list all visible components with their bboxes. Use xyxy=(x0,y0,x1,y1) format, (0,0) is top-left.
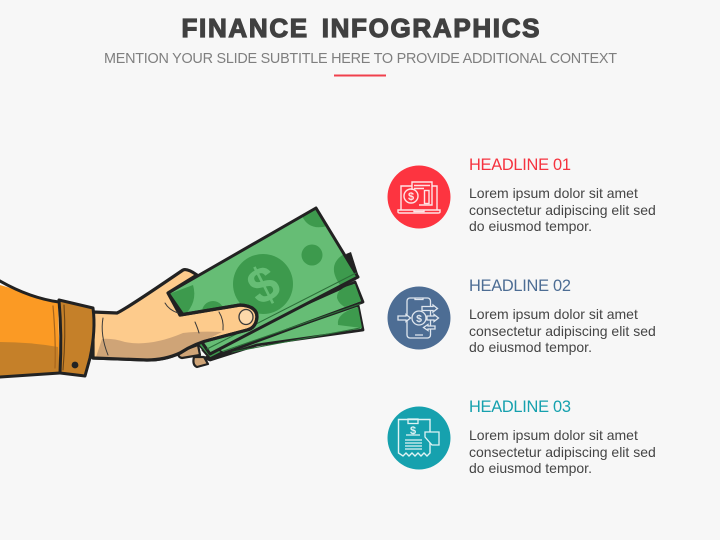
headline 03: HEADLINE 03 xyxy=(469,398,571,416)
sleeve xyxy=(0,281,60,377)
headline 02: HEADLINE 02 xyxy=(469,277,571,295)
title: FINANCE INFOGRAPHICS xyxy=(182,13,540,43)
hand outline repeat xyxy=(93,305,257,360)
description 02: do eiusmod tempor. xyxy=(469,339,592,355)
description 02: consectetur adipiscing elit sed xyxy=(469,323,656,339)
title accent rule xyxy=(334,74,386,76)
banknote 1 (front) xyxy=(168,208,358,354)
fingers behind bills xyxy=(178,345,208,367)
illustration: hand holding banknotes xyxy=(0,208,363,377)
cuff xyxy=(59,300,94,376)
banknote 2 (middle) xyxy=(203,282,363,358)
hand xyxy=(93,270,257,360)
description 03: consectetur adipiscing elit sed xyxy=(469,444,656,460)
small back tab xyxy=(346,252,358,276)
description 01: Lorem ipsum dolor sit amet xyxy=(469,185,638,201)
item 2 xyxy=(388,277,660,355)
subtitle: MENTION YOUR SLIDE SUBTITLE HERE TO PROVIDE ADDITIONAL CONTEXT xyxy=(104,51,617,67)
banknote 3 (back) xyxy=(205,305,363,360)
description 01: do eiusmod tempor. xyxy=(469,218,592,234)
hand shadow xyxy=(96,332,222,359)
icon: laptop with dollar invoice xyxy=(388,166,450,228)
headline 01: HEADLINE 01 xyxy=(469,156,571,174)
bill dot xyxy=(302,244,322,266)
item 3 xyxy=(388,398,660,476)
icon: receipt with hand: $ xyxy=(410,425,416,437)
thumbnail and creases xyxy=(102,303,253,355)
dollar sign: $ xyxy=(238,254,289,316)
watermark corners xyxy=(302,209,327,227)
description 03: do eiusmod tempor. xyxy=(469,460,592,476)
description 03: Lorem ipsum dolor sit amet xyxy=(469,427,638,443)
item 1 xyxy=(388,156,660,234)
icon: phone with dollar and arrows: $ xyxy=(416,313,422,325)
icon: receipt with hand xyxy=(388,406,450,470)
description 01: consectetur adipiscing elit sed xyxy=(469,202,656,218)
bill medallion xyxy=(233,254,293,314)
description 02: Lorem ipsum dolor sit amet xyxy=(469,306,638,322)
banknote bundle left edge xyxy=(197,340,222,358)
icon: phone with dollar and arrows xyxy=(388,286,450,350)
icon: laptop with dollar invoice: $ xyxy=(408,191,414,203)
